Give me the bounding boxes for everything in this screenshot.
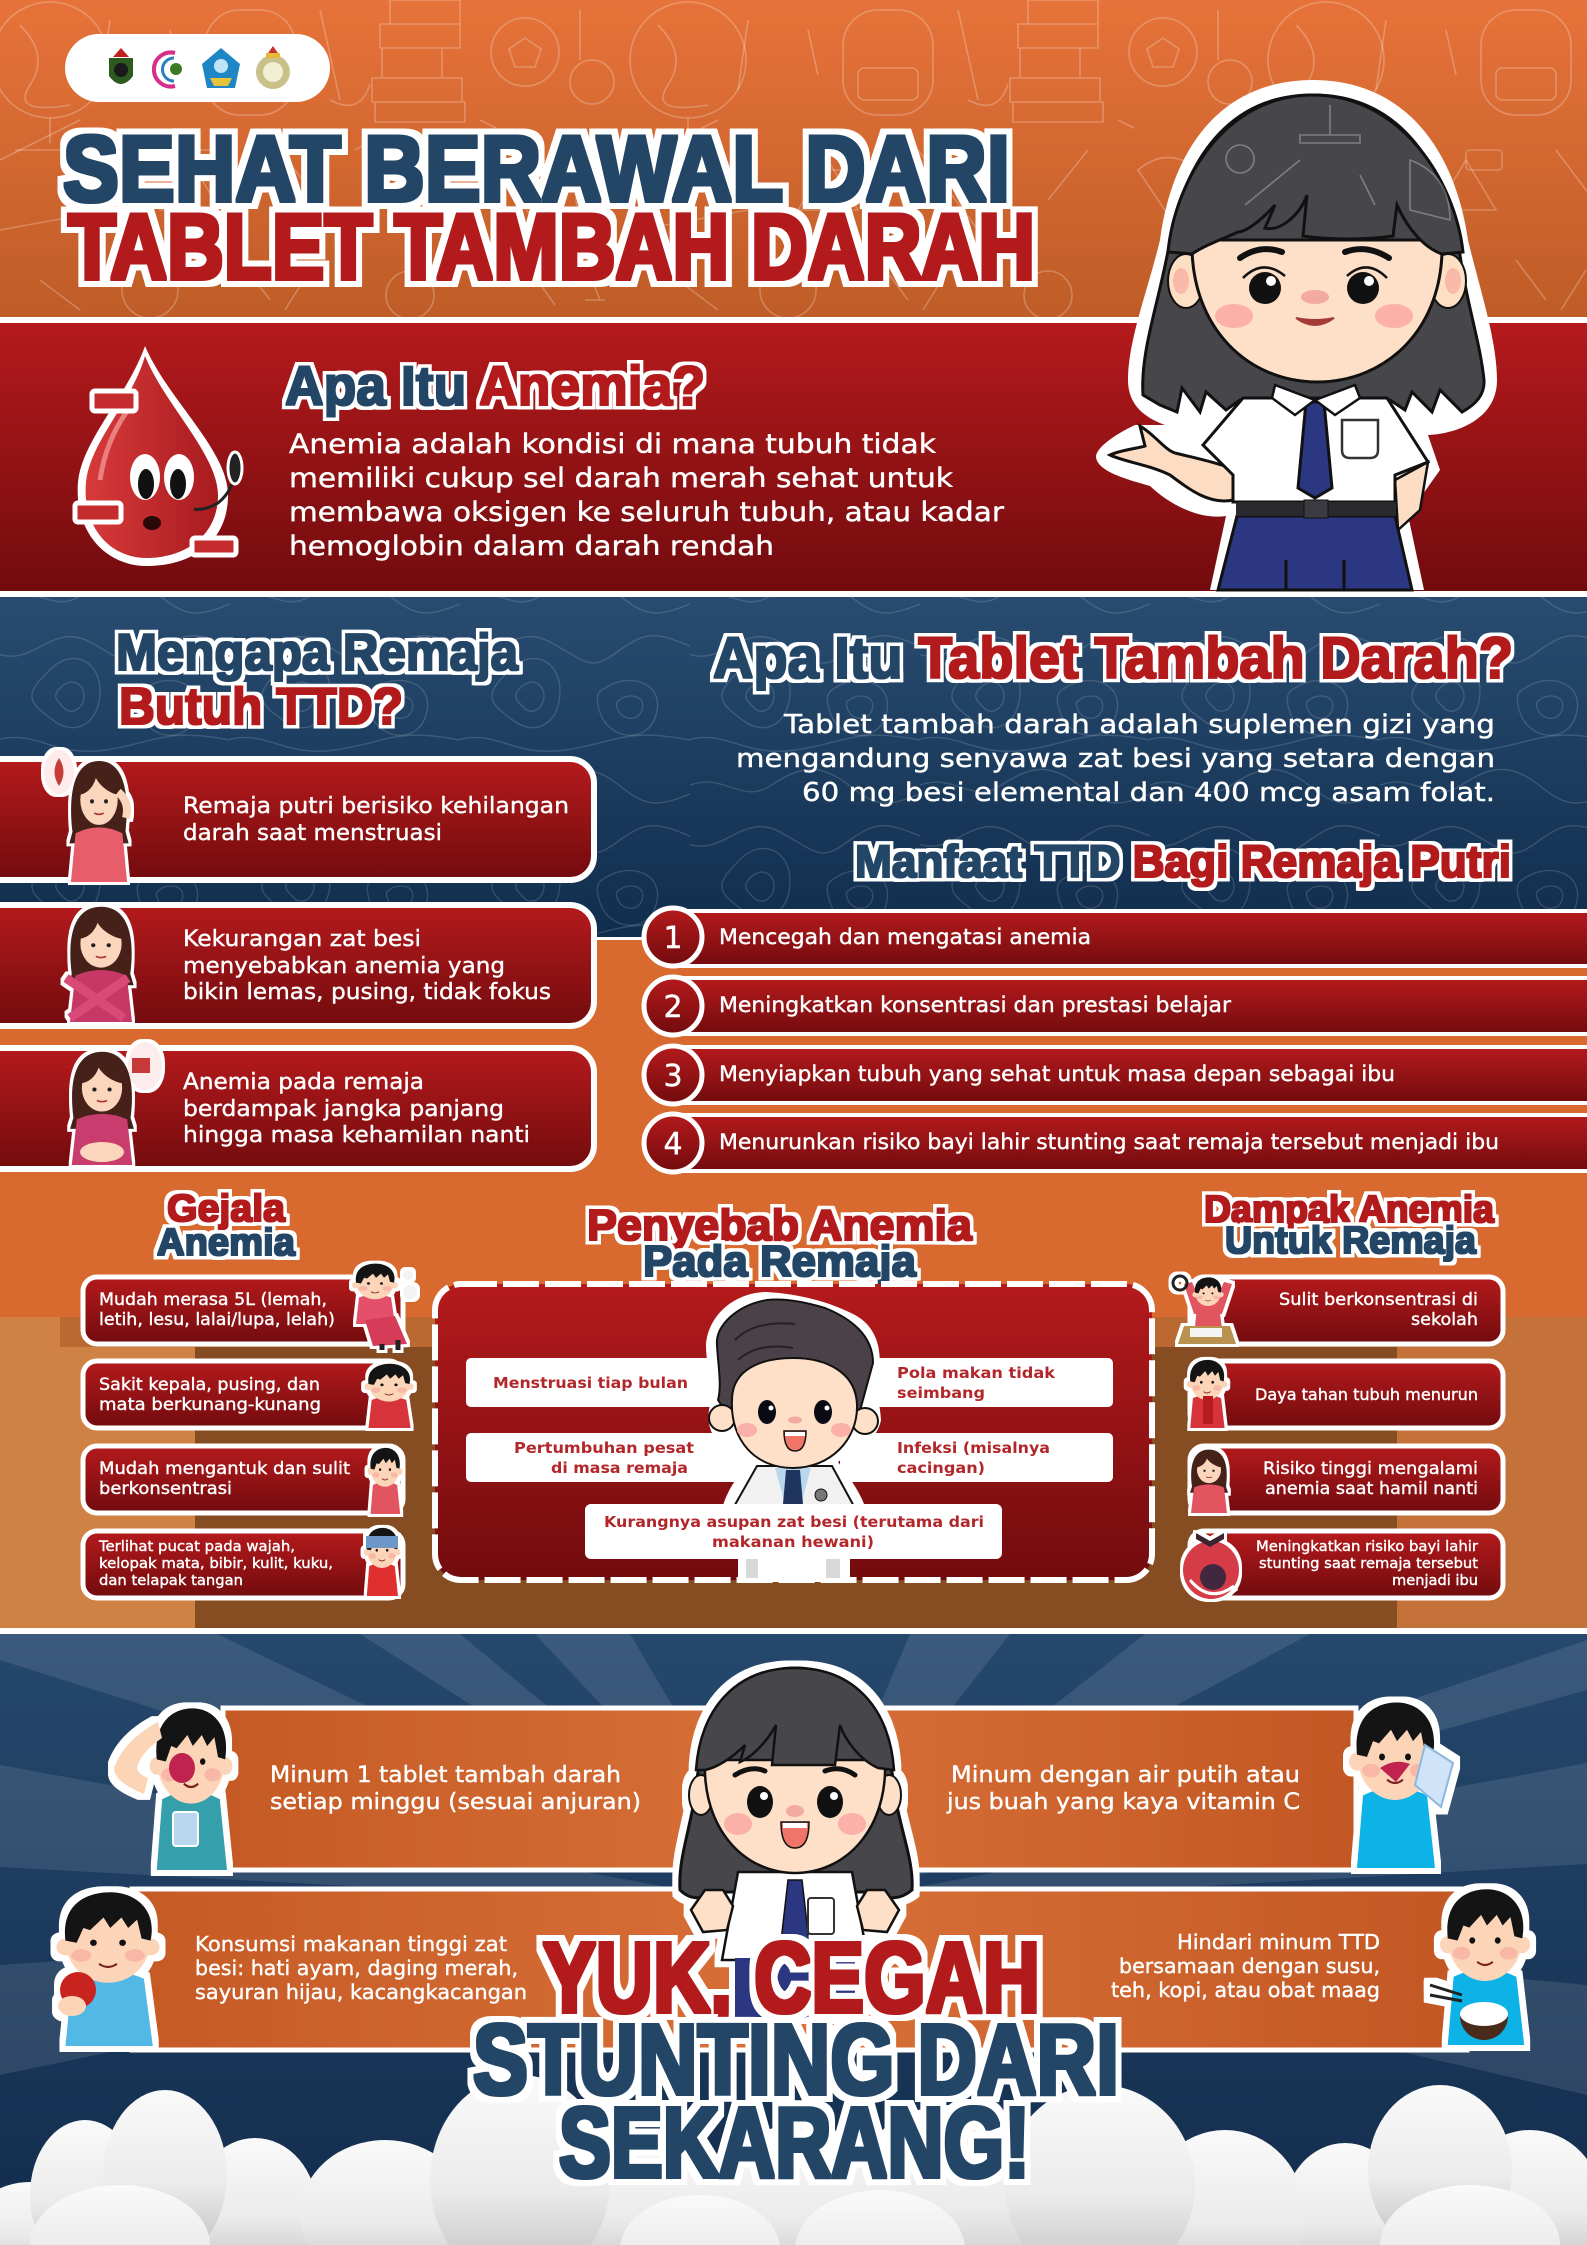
panel: symptom 1 (83, 1264, 417, 1350)
text: anemia definition: hemoglobin dalam darah rendah (289, 531, 774, 562)
panel: symptom 4 (83, 1528, 403, 1598)
text: menyebabkan anemia yang (183, 953, 505, 979)
character: woman with menstrual pain (44, 750, 129, 882)
text (98, 1539, 333, 1589)
cause: kurang zat besi: Kurangnya asupan zat besi (terutama dari (604, 1513, 984, 1531)
cause: infeksi: Infeksi (misalnya (897, 1439, 1050, 1457)
panel: reason 1 (0, 750, 594, 882)
text: dan telapak tangan (99, 1573, 243, 1589)
text (183, 793, 569, 846)
text: tablet definition (736, 710, 1495, 808)
panel: benefit 3: Menyiapkan tubuh yang sehat untuk masa depan sebagai ibu (719, 1062, 1395, 1086)
character: doctor (706, 1292, 881, 1582)
character: pale child (364, 1528, 400, 1596)
text: Terlihat pucat pada wajah, (98, 1539, 295, 1555)
text: Risiko tinggi mengalami (1263, 1459, 1478, 1479)
text: minum tablet: setiap minggu (sesuai anjuran) (270, 1790, 641, 1815)
character: boy taking tablet (114, 1708, 232, 1870)
text: hindari: bersamaan dengan susu, (1119, 1954, 1380, 1978)
character: student girl top (1096, 80, 1497, 590)
cause: pertumbuhan: di masa remaja (551, 1459, 688, 1477)
panel: tip row 2 (132, 1889, 1467, 2050)
character: pregnant body (1183, 1533, 1239, 1599)
text: stunting saat remaja tersebut (1259, 1556, 1478, 1572)
panel: benefit 1: 1 (663, 921, 683, 956)
cause: pola makan: Pola makan tidak (897, 1364, 1056, 1382)
text: anemia definition (289, 429, 1004, 562)
logo 3 (202, 48, 240, 88)
heading: mengapa remaja butuh ttd (116, 624, 519, 736)
cause: pertumbuhan: Pertumbuhan pesat (514, 1439, 695, 1457)
orange section background (0, 937, 1587, 1634)
title: TABLET TAMBAH DARAH (68, 194, 1035, 299)
text: minum air (946, 1763, 1300, 1815)
character: boy drinking (1349, 1703, 1453, 1868)
text: kelopak mata, bibir, kulit, kuku, (99, 1556, 333, 1572)
text: tablet definition: 60 mg besi elemental dan 400 mcg asam folat. (802, 778, 1495, 808)
text: konsumsi zat besi: sayuran hijau, kacangkacangan (195, 1980, 527, 2004)
character: woman dizzy (66, 907, 134, 1022)
heading: penyebab anemia (587, 1201, 973, 1286)
cause: kurang zat besi (585, 1504, 1002, 1559)
text: Kekurangan zat besi (183, 926, 421, 952)
text: berkonsentrasi (99, 1479, 232, 1499)
heading: dampak anemia (1204, 1189, 1495, 1262)
heading: mengapa remaja butuh ttd: Butuh TTD? (119, 678, 403, 736)
text: anemia saat hamil nanti (1265, 1479, 1478, 1499)
heading: gejala anemia: Anemia (157, 1222, 296, 1264)
logo 4 (256, 46, 290, 89)
text (183, 1069, 530, 1148)
text: hingga masa kehamilan nanti (183, 1122, 530, 1148)
character: tired woman (1190, 1450, 1228, 1513)
cause: menstruasi (466, 1358, 756, 1407)
text: mata berkunang-kunang (99, 1395, 321, 1415)
text: konsumsi zat besi (195, 1932, 527, 2004)
slogan: YUK, CEGAH (543, 1922, 1040, 2034)
heading: dampak anemia: Untuk Remaja (1225, 1220, 1477, 1262)
panel: benefit 2 (644, 977, 1587, 1035)
panel: impact 1 (1173, 1276, 1503, 1344)
heading: manfaat ttd: Manfaat TTD Bagi Remaja Putri (855, 836, 1511, 887)
logo 2 (154, 52, 182, 86)
panel: benefit 3: 3 (663, 1059, 683, 1094)
text: konsumsi zat besi: besi: hati ayam, daging merah, (195, 1956, 518, 1980)
text: Sulit berkonsentrasi di (1279, 1290, 1478, 1310)
text: Meningkatkan risiko bayi lahir (1256, 1539, 1478, 1555)
panel: symptom 3 (83, 1446, 403, 1514)
text: Daya tahan tubuh menurun (1255, 1385, 1478, 1404)
cause: kurang zat besi: makanan hewani) (712, 1533, 874, 1551)
text: tablet definition: Tablet tambah darah adalah suplemen gizi yang (783, 710, 1495, 740)
text: hindari (1111, 1930, 1380, 2002)
character: stressed child at desk (1173, 1276, 1236, 1344)
panel: reason 3 (0, 1042, 594, 1169)
text (1263, 1459, 1478, 1499)
text: minum tablet: Minum 1 tablet tambah darah (270, 1763, 621, 1788)
heading: penyebab anemia: Penyebab Anemia (587, 1201, 973, 1250)
panel: impact 2 (1187, 1360, 1503, 1428)
text: minum air: jus buah yang kaya vitamin C (946, 1790, 1300, 1815)
heading: dampak anemia: Dampak Anemia (1204, 1189, 1495, 1231)
character: sick child (1187, 1360, 1227, 1428)
text: Remaja putri berisiko kehilangan (183, 793, 569, 819)
cause: pertumbuhan (466, 1433, 756, 1482)
cause: menstruasi: Menstruasi tiap bulan (493, 1374, 688, 1392)
panel: benefit 2: Meningkatkan konsentrasi dan prestasi belajar (719, 993, 1231, 1017)
text: letih, lesu, lalai/lupa, lelah) (99, 1310, 335, 1330)
slogan (473, 1922, 1119, 2199)
heading: apa itu tablet tambah darah: Apa Itu Tablet Tambah Darah? (713, 626, 1513, 691)
text (1256, 1539, 1478, 1589)
bottom background with rays (0, 1634, 1587, 2245)
text: hindari: Hindari minum TTD (1177, 1930, 1380, 1954)
panel: benefit 3 (644, 1046, 1587, 1104)
anemia band (0, 317, 1587, 597)
cause: pola makan (840, 1358, 1113, 1407)
logo 1 (109, 48, 133, 84)
text: tablet definition: mengandung senyawa zat besi yang setara dengan (736, 744, 1495, 774)
character: student girl center (680, 1668, 912, 2018)
text: konsumsi zat besi: Konsumsi makanan tinggi zat (195, 1932, 507, 1956)
text (99, 1459, 350, 1499)
panel: impact 4 (1183, 1531, 1503, 1599)
text: menjadi ibu (1392, 1573, 1478, 1589)
slogan: SEKARANG! (559, 2087, 1030, 2199)
panel: benefit 1: Mencegah dan mengatasi anemia (719, 925, 1091, 949)
text: berdampak jangka panjang (183, 1096, 504, 1122)
title: SEHAT BERAWAL DARI (63, 116, 1010, 221)
cause: infeksi (840, 1433, 1113, 1482)
text: anemia definition: Anemia adalah kondisi di mana tubuh tidak (289, 429, 937, 460)
icon: blood drop mascot (75, 346, 242, 566)
character: tired girl (352, 1264, 417, 1350)
clouds (0, 2075, 1587, 2245)
panel: benefit 1 (644, 908, 1587, 966)
heading: apa itu anemia: Apa Itu Anemia? (285, 354, 705, 417)
panel: reason 2 (0, 905, 594, 1026)
text: sekolah (1411, 1310, 1478, 1330)
cause: pola makan: seimbang (897, 1384, 985, 1402)
blue section background (0, 597, 1587, 937)
title (63, 116, 1035, 299)
text: hindari: teh, kopi, atau obat maag (1111, 1978, 1380, 2002)
character: boy eating rice (1430, 1889, 1530, 2045)
character: sleepy child (368, 1448, 402, 1514)
header background (0, 0, 1587, 318)
text: anemia definition: memiliki cukup sel darah merah sehat untuk (289, 463, 954, 494)
slogan: STUNTING DARI (473, 2004, 1119, 2116)
text: minum tablet (270, 1763, 641, 1815)
panel: benefit 4: Menurunkan risiko bayi lahir stunting saat remaja tersebut menjadi ibu (719, 1130, 1499, 1154)
panel: benefit 2: 2 (663, 990, 683, 1025)
character: dizzy child (364, 1364, 414, 1428)
text (99, 1290, 335, 1330)
heading: mengapa remaja butuh ttd: Mengapa Remaja (116, 624, 519, 682)
text: anemia definition: membawa oksigen ke seluruh tubuh, atau kadar (289, 497, 1004, 528)
logo pill (65, 34, 330, 102)
panel: impact 3 (1190, 1446, 1503, 1513)
text: darah saat menstruasi (183, 820, 442, 846)
heading: penyebab anemia: Pada Remaja (643, 1237, 917, 1286)
text (99, 1375, 321, 1415)
character: boy eating apple (56, 1892, 160, 2046)
text: Sakit kepala, pusing, dan (99, 1375, 320, 1395)
heading: gejala anemia (157, 1188, 296, 1264)
panel: tip row 1 (223, 1708, 1356, 1870)
cause: infeksi: cacingan) (897, 1459, 985, 1477)
text: Mudah merasa 5L (lemah, (99, 1290, 327, 1310)
panel: causes (435, 1284, 1152, 1582)
text: Mudah mengantuk dan sulit (99, 1459, 350, 1479)
panel: benefit 4: 4 (663, 1127, 683, 1162)
text: minum air: Minum dengan air putih atau (951, 1763, 1300, 1788)
heading: gejala anemia: Gejala (167, 1188, 286, 1230)
panel: benefit 4 (644, 1114, 1587, 1172)
panel: symptom 2 (83, 1361, 414, 1428)
text (1279, 1290, 1478, 1330)
text: bikin lemas, pusing, tidak fokus (183, 979, 551, 1005)
text (183, 926, 551, 1005)
text: Anemia pada remaja (183, 1069, 424, 1095)
character: woman holding belly (70, 1042, 162, 1165)
